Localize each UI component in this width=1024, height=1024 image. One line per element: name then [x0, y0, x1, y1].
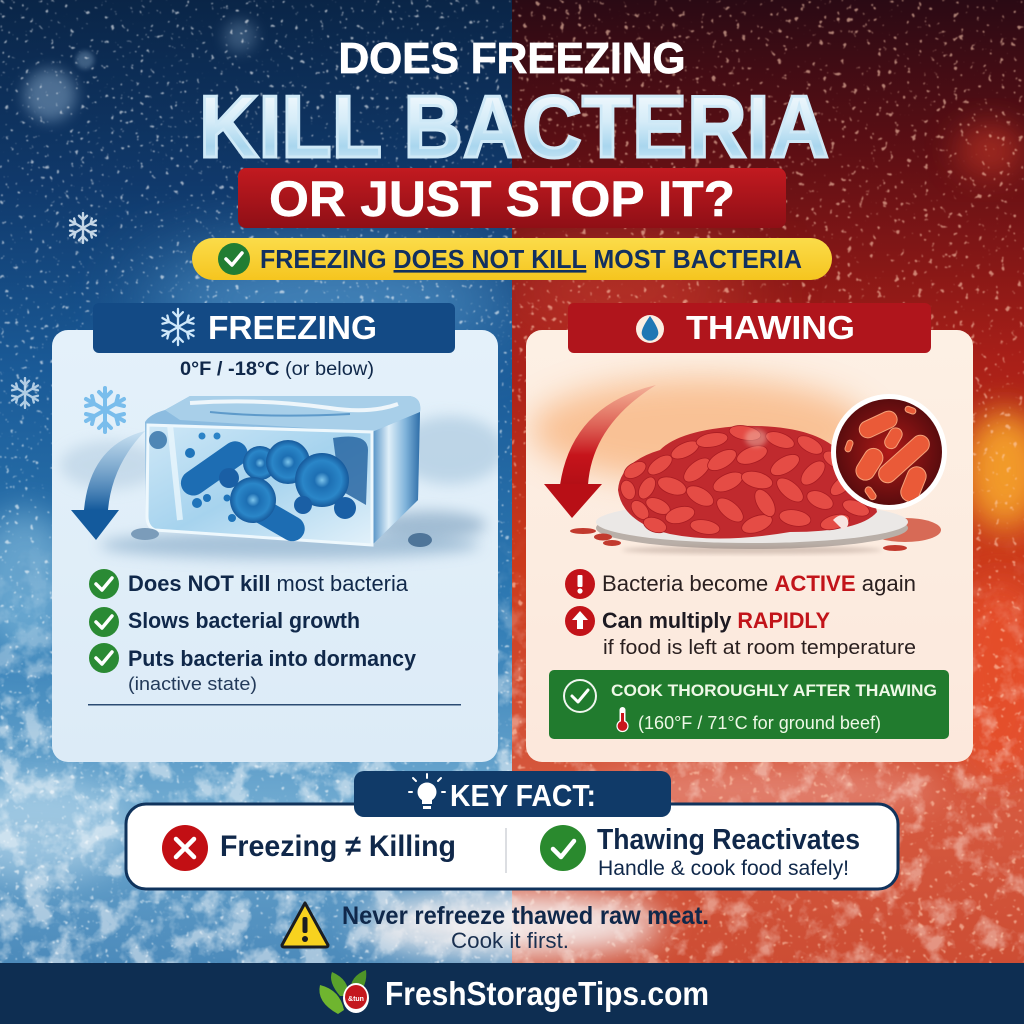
bullet list: thawing: Can multiply RAPIDLY: [602, 608, 830, 633]
bullet list: thawing: Bacteria become ACTIVE again: [602, 571, 916, 596]
key fact box: Thawing Reactivates: [597, 824, 860, 856]
key fact box: Handle & cook food safely!: [598, 857, 849, 880]
icon: leaves and logo: [319, 970, 369, 1014]
freezing temperature: 0°F / -18°C (or below): [180, 359, 374, 380]
freezing header: FREEZING: [208, 309, 377, 346]
icon: warning triangle: [282, 903, 328, 947]
warning: Cook it first.: [451, 928, 569, 953]
icon: red cross: [162, 825, 208, 871]
freezing header: [93, 303, 455, 353]
ground meat strands: [618, 423, 872, 537]
bullet list: thawing: if food is left at room temperature: [603, 637, 916, 659]
yellow callout pill: FREEZING DOES NOT KILL MOST BACTERIA: [260, 244, 802, 274]
icon: green check: [540, 825, 586, 871]
bullet list: freezing: Slows bacterial growth: [128, 608, 360, 633]
key fact box: [126, 804, 898, 889]
panel: freezing: [52, 330, 505, 762]
red banner: or just stop it: OR JUST STOP IT?: [269, 171, 735, 227]
bullet list: freezing: (inactive state): [128, 674, 257, 694]
arrow: temperature down: [71, 431, 145, 540]
inset: magnified bacteria: [831, 394, 947, 510]
arrow: warming down: [544, 385, 656, 518]
footer band: [0, 963, 1024, 1024]
thawing illustration: raw ground beef on plate: [530, 378, 941, 554]
key fact header: KEY FACT:: [450, 778, 596, 813]
icon: light bulb: [409, 774, 445, 809]
key fact header: [354, 771, 671, 817]
green callout: cook thoroughly: COOK THOROUGHLY AFTER THAWING: [611, 681, 937, 700]
icon: thermometer: [617, 707, 628, 732]
thawing header: THAWING: [686, 309, 855, 346]
key fact box: Freezing ≠ Killing: [220, 830, 456, 863]
rod bacterium: [180, 441, 248, 496]
bullet list: thawing: [565, 569, 916, 659]
thawing header: [568, 303, 931, 353]
bullet list: freezing: Puts bacteria into dormancy: [128, 646, 417, 671]
title line: kill bacteria: KILL BACTERIA: [199, 77, 829, 176]
green callout: cook thoroughly: (160°F / 71°C for ground beef): [638, 713, 881, 733]
green callout: cook thoroughly: [549, 670, 949, 739]
footer band: FreshStorageTips.com: [385, 975, 709, 1012]
icon: snowflake above arrow: [86, 388, 124, 432]
bullet list: freezing: Does NOT kill most bacteria: [128, 571, 409, 596]
panel: thawing: [526, 330, 973, 762]
round bacteria: [243, 446, 271, 480]
title line: does freezing: DOES FREEZING: [338, 34, 686, 83]
icon: leaves and logo: &tun: [348, 996, 364, 1003]
yellow callout pill: [192, 238, 832, 280]
icon: water drop: [636, 315, 664, 343]
warning: [282, 902, 709, 953]
freezing illustration: ice block with bacteria: [60, 396, 505, 559]
warning: Never refreeze thawed raw meat.: [342, 902, 709, 930]
title: [199, 34, 829, 176]
bullet list: freezing: [88, 569, 461, 706]
